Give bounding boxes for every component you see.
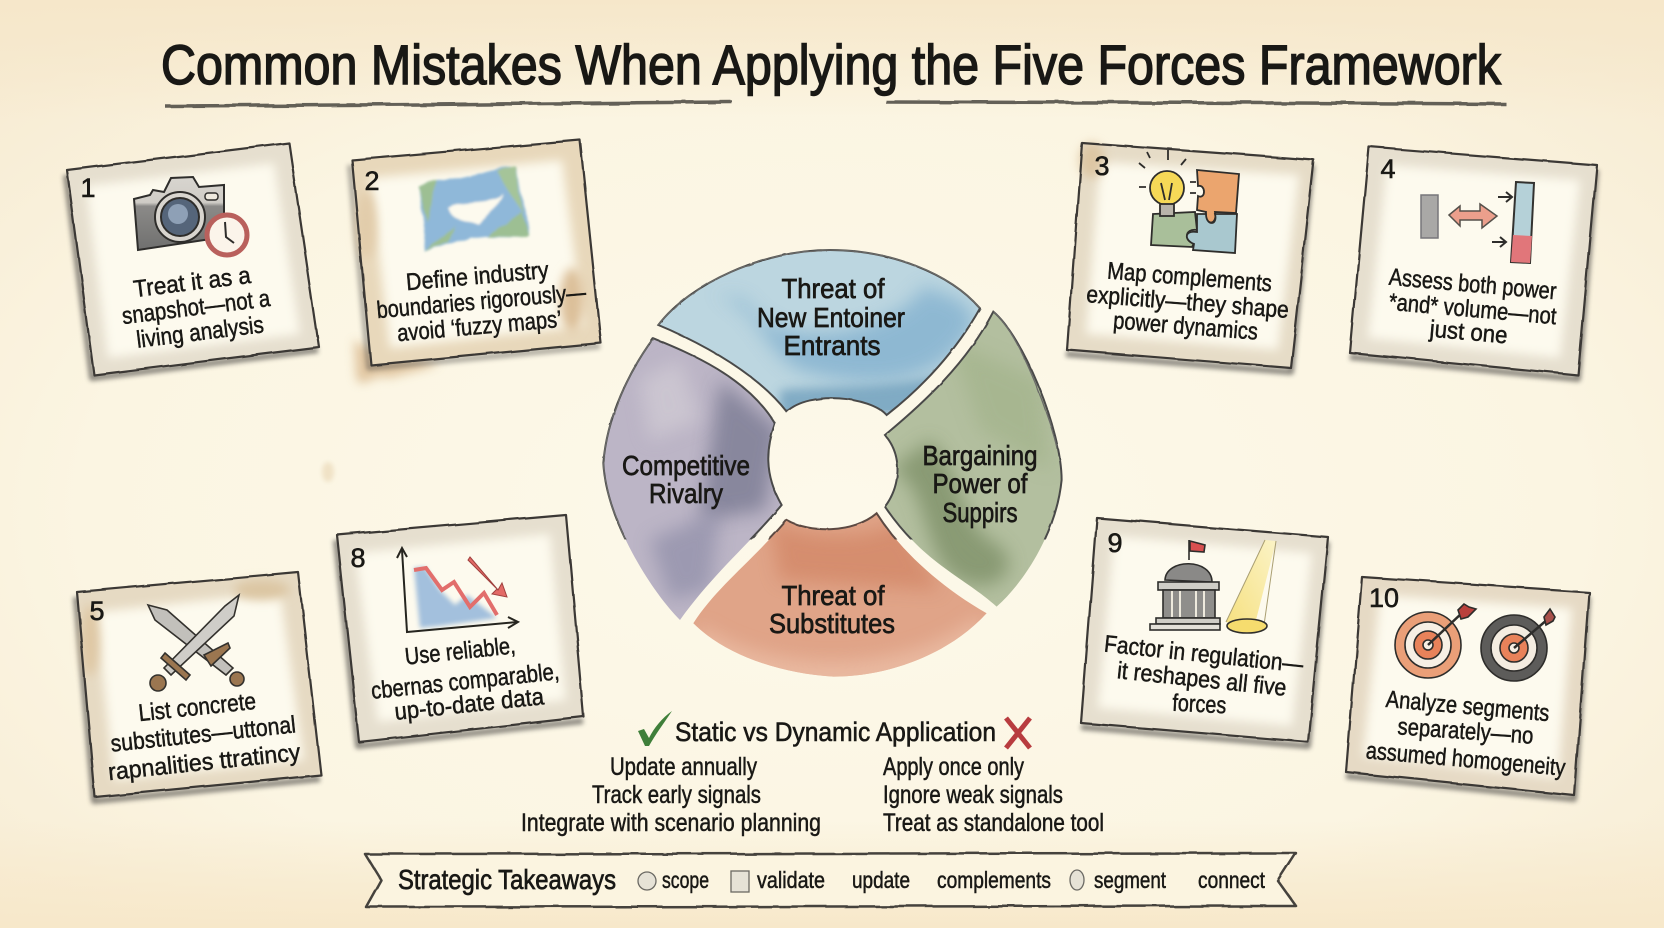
panel: card 5 bbox=[76, 572, 321, 801]
donut labels: Entrants bbox=[784, 330, 880, 361]
donut labels: Bargaining bbox=[922, 440, 1038, 471]
icon: bars and arrow bbox=[1421, 182, 1534, 263]
panel: card 10 bbox=[1346, 577, 1589, 799]
list: dynamic application bbox=[521, 753, 821, 837]
segment: competitive rivalry bbox=[602, 337, 783, 620]
donut labels: Threat of bbox=[782, 580, 885, 611]
card 1 text bbox=[120, 262, 272, 354]
icon: lightbulb and puzzle bbox=[1139, 150, 1239, 253]
segment: threat of substitutes bbox=[693, 512, 986, 677]
heading: static vs dynamic: Static vs Dynamic Application bbox=[675, 717, 996, 747]
icon: fuzzy map bbox=[418, 168, 528, 252]
list: static application: Apply once only bbox=[883, 753, 1024, 781]
card 4 text: Assess both power bbox=[1388, 264, 1558, 305]
card 4 text bbox=[1388, 264, 1558, 349]
card 10 text: assumed homogeneity bbox=[1365, 737, 1566, 782]
title underline bbox=[165, 102, 1506, 106]
icon: red cross bbox=[1006, 718, 1030, 748]
card 8 text bbox=[370, 632, 561, 726]
card 2 text: Define industry bbox=[405, 257, 550, 296]
donut labels: Substitutes bbox=[769, 608, 895, 639]
list: static application: Treat as standalone tool bbox=[883, 809, 1104, 837]
donut labels: Threat of bbox=[782, 273, 885, 304]
donut labels: Rivalry bbox=[649, 478, 723, 509]
number 4: 4 bbox=[1380, 154, 1396, 184]
card 9 text: it reshapes all five bbox=[1116, 657, 1288, 702]
icon: camera with clock bbox=[134, 177, 247, 255]
donut labels: New Entoiner bbox=[757, 302, 905, 333]
card 9 text bbox=[1103, 631, 1305, 719]
panel: card 1 bbox=[66, 143, 319, 378]
banner heading: Strategic Takeaways bbox=[398, 864, 616, 895]
icon: government building and spotlight bbox=[1150, 540, 1276, 633]
card 5 text: rapnalities ttratincy bbox=[107, 739, 302, 786]
number 8: 8 bbox=[350, 543, 366, 573]
donut labels: Suppirs bbox=[942, 497, 1018, 528]
list: static application bbox=[883, 753, 1104, 837]
list: dynamic application: Track early signals bbox=[592, 781, 761, 809]
card 5 text bbox=[107, 688, 302, 786]
panel: card 9 bbox=[1081, 518, 1328, 746]
card 5 text: substitutes—uttonal bbox=[109, 711, 297, 758]
icon: falling chart bbox=[397, 548, 518, 632]
number 2: 2 bbox=[364, 166, 380, 196]
card 8 text: up-to-date data bbox=[393, 683, 546, 726]
banner items: validate bbox=[757, 867, 825, 893]
donut labels: Competitive bbox=[622, 450, 750, 481]
card 9 text: forces bbox=[1172, 690, 1227, 719]
banner items: update bbox=[852, 867, 910, 893]
card 10 text: separately—no bbox=[1397, 713, 1534, 750]
card 1 text: Treat it as a bbox=[132, 262, 253, 303]
banner items bbox=[638, 867, 1266, 893]
segment: threat of new entrants bbox=[656, 249, 982, 416]
banner items: connect bbox=[1198, 867, 1266, 893]
icon: two targets bbox=[1395, 604, 1555, 681]
panel: card 3 bbox=[1066, 142, 1314, 372]
panel: card 8 bbox=[336, 515, 584, 746]
banner items: complements bbox=[937, 867, 1051, 893]
card 10 text bbox=[1365, 686, 1566, 782]
card 8 text: cbernas comparable, bbox=[370, 658, 561, 705]
list: dynamic application: Update annually bbox=[610, 753, 757, 781]
card 2 text: boundaries rigorously— bbox=[376, 279, 587, 324]
card 2 text: avoid ‘fuzzy maps’ bbox=[396, 306, 563, 347]
card 1 text: living analysis bbox=[135, 311, 265, 354]
card 3 text: Map complements bbox=[1106, 258, 1273, 297]
icon: green check bbox=[638, 711, 672, 746]
number 3: 3 bbox=[1094, 151, 1110, 181]
card 3 text bbox=[1085, 258, 1290, 346]
panel: card 2 bbox=[350, 140, 601, 383]
donut labels: Power of bbox=[932, 468, 1028, 499]
card 10 text: Analyze segments bbox=[1385, 686, 1551, 727]
number 5: 5 bbox=[89, 596, 105, 626]
number 1: 1 bbox=[80, 173, 96, 203]
banner items: segment bbox=[1094, 867, 1166, 893]
card 5 text: List concrete bbox=[137, 688, 257, 727]
icon: crossed swords bbox=[148, 595, 244, 691]
segment: bargaining power of suppliers bbox=[884, 310, 1063, 606]
card 9 text: Factor in regulation— bbox=[1103, 631, 1305, 678]
card 4 text: just one bbox=[1428, 316, 1509, 349]
banner items: scope bbox=[662, 867, 709, 893]
donut labels bbox=[622, 273, 1038, 639]
card 3 text: power dynamics bbox=[1112, 307, 1259, 346]
number 10: 10 bbox=[1369, 583, 1399, 613]
list: dynamic application: Integrate with scenario planning bbox=[521, 809, 821, 837]
card 8 text: Use reliable, bbox=[404, 632, 517, 671]
chart: five forces donut bbox=[602, 249, 1063, 677]
panel: card 4 bbox=[1350, 147, 1597, 379]
card 1 text: snapshot—not a bbox=[120, 285, 272, 330]
number 9: 9 bbox=[1107, 528, 1123, 558]
card 4 text: *and* volume—not bbox=[1388, 289, 1558, 330]
list: static application: Ignore weak signals bbox=[883, 781, 1063, 809]
card 3 text: explicitly—they shape bbox=[1085, 281, 1290, 324]
card 2 text bbox=[376, 257, 587, 347]
banner: strategic takeaways bbox=[365, 853, 1296, 907]
